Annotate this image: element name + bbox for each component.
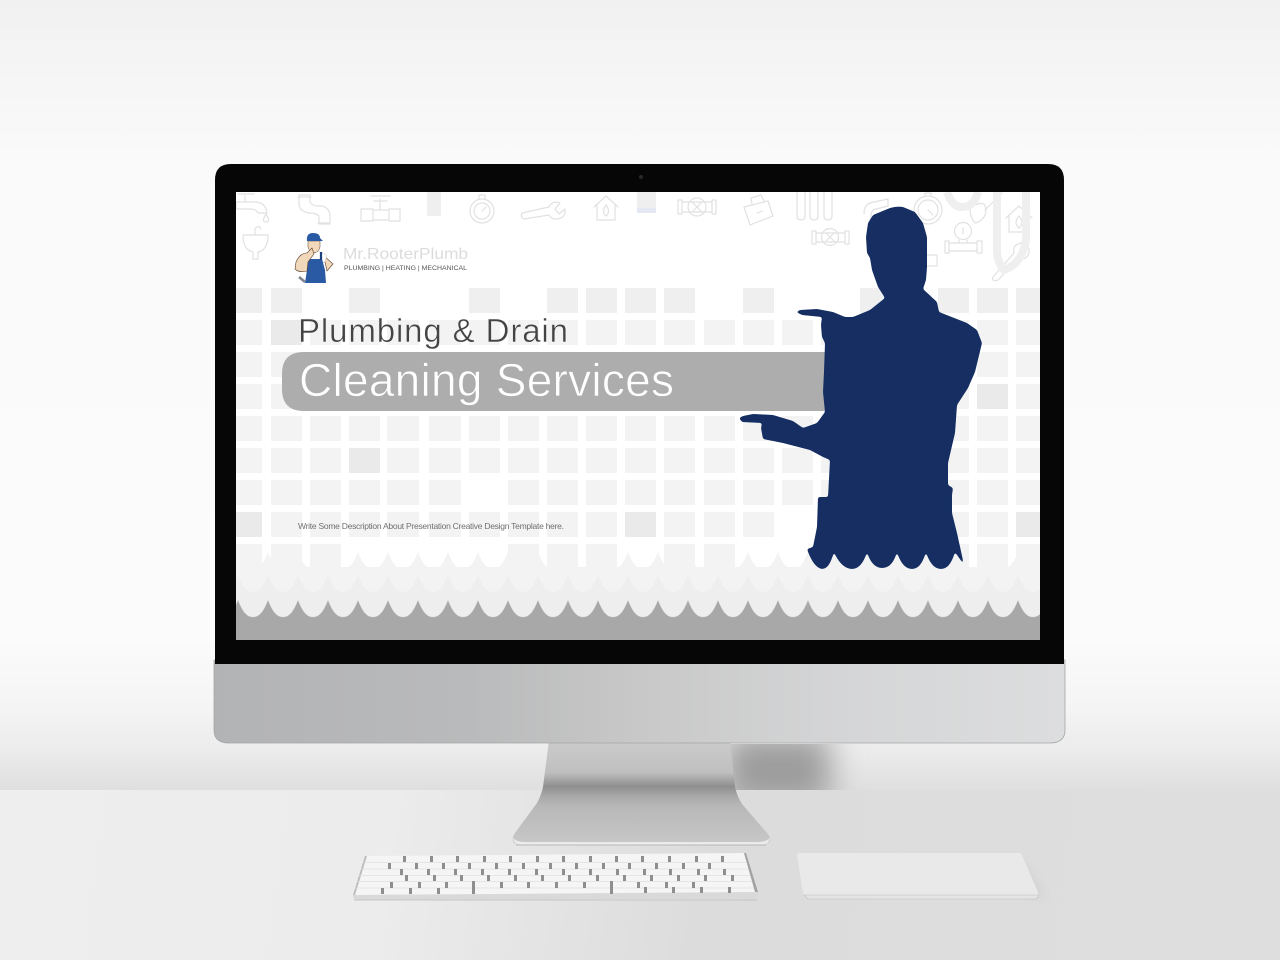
- webcam: [639, 175, 643, 179]
- title pill: [282, 352, 830, 411]
- pale pipe: vertical: [997, 192, 1026, 270]
- water waves: [236, 553, 1040, 640]
- icon: elbow pipe: [298, 195, 330, 224]
- title line one: Plumbing & Drain: [298, 312, 568, 349]
- trackpad shadow: [1022, 858, 1045, 898]
- monitor stand: [513, 740, 770, 845]
- logo tagline: PLUMBING | HEATING | MECHANICAL: [344, 265, 467, 272]
- icon: pipe bend: [864, 198, 888, 219]
- desk surface: [0, 790, 1280, 960]
- description: Write Some Description About Presentation Creative Design Template here.: [298, 521, 564, 531]
- wave flat band: [308, 567, 1008, 569]
- trackpad top: [797, 853, 1038, 895]
- logo mascot: [295, 233, 333, 283]
- icon: valve: [361, 196, 400, 221]
- icon: valve meter: [678, 198, 716, 216]
- title line two: Cleaning Services: [299, 354, 674, 406]
- icon: gauge: [470, 195, 494, 223]
- icon: faucet: [236, 194, 268, 222]
- keyboard key row lines: [355, 862, 754, 888]
- monitor bezel: [215, 164, 1064, 664]
- icon: wrench: [521, 202, 565, 219]
- icon: pressure valve: [945, 222, 982, 253]
- plumber silhouette: [739, 207, 982, 569]
- icon: toolbox: [744, 195, 773, 225]
- keyboard: [353, 853, 758, 900]
- pale pipe: U bend: [947, 192, 978, 207]
- stand shadow on wall: [730, 744, 848, 790]
- trackpad: [797, 853, 1045, 899]
- pale bar left: [427, 192, 441, 216]
- background plumbing icons: [236, 192, 1032, 281]
- monitor chin: [214, 660, 1065, 743]
- icon: house with drop: [594, 196, 618, 220]
- icon: valve meter two: [812, 228, 849, 246]
- tile wall: [236, 288, 1040, 572]
- icon: sink: [243, 226, 268, 259]
- wave bottom gray: [236, 600, 1040, 640]
- pale bar centre: [637, 192, 656, 213]
- icon: house with drop two: [1006, 206, 1032, 232]
- slide screen: [236, 192, 1040, 640]
- logo: [295, 233, 468, 283]
- trackpad edge: [804, 895, 1038, 899]
- keyboard body: [353, 853, 758, 900]
- wave layer one: [244, 553, 1040, 592]
- wave layer two: [208, 575, 1048, 675]
- keyboard keys: [381, 856, 734, 894]
- icon: pipe stub: [925, 255, 937, 266]
- icon: round gauge: [914, 193, 942, 224]
- pale pipes: [947, 192, 1026, 270]
- icon: plunger: [970, 193, 1002, 223]
- logo name: Mr.RooterPlumb: [343, 246, 468, 263]
- monitor: [214, 164, 1065, 743]
- icon: adjustable wrench: [993, 243, 1029, 281]
- icon: test tubes: [797, 192, 832, 220]
